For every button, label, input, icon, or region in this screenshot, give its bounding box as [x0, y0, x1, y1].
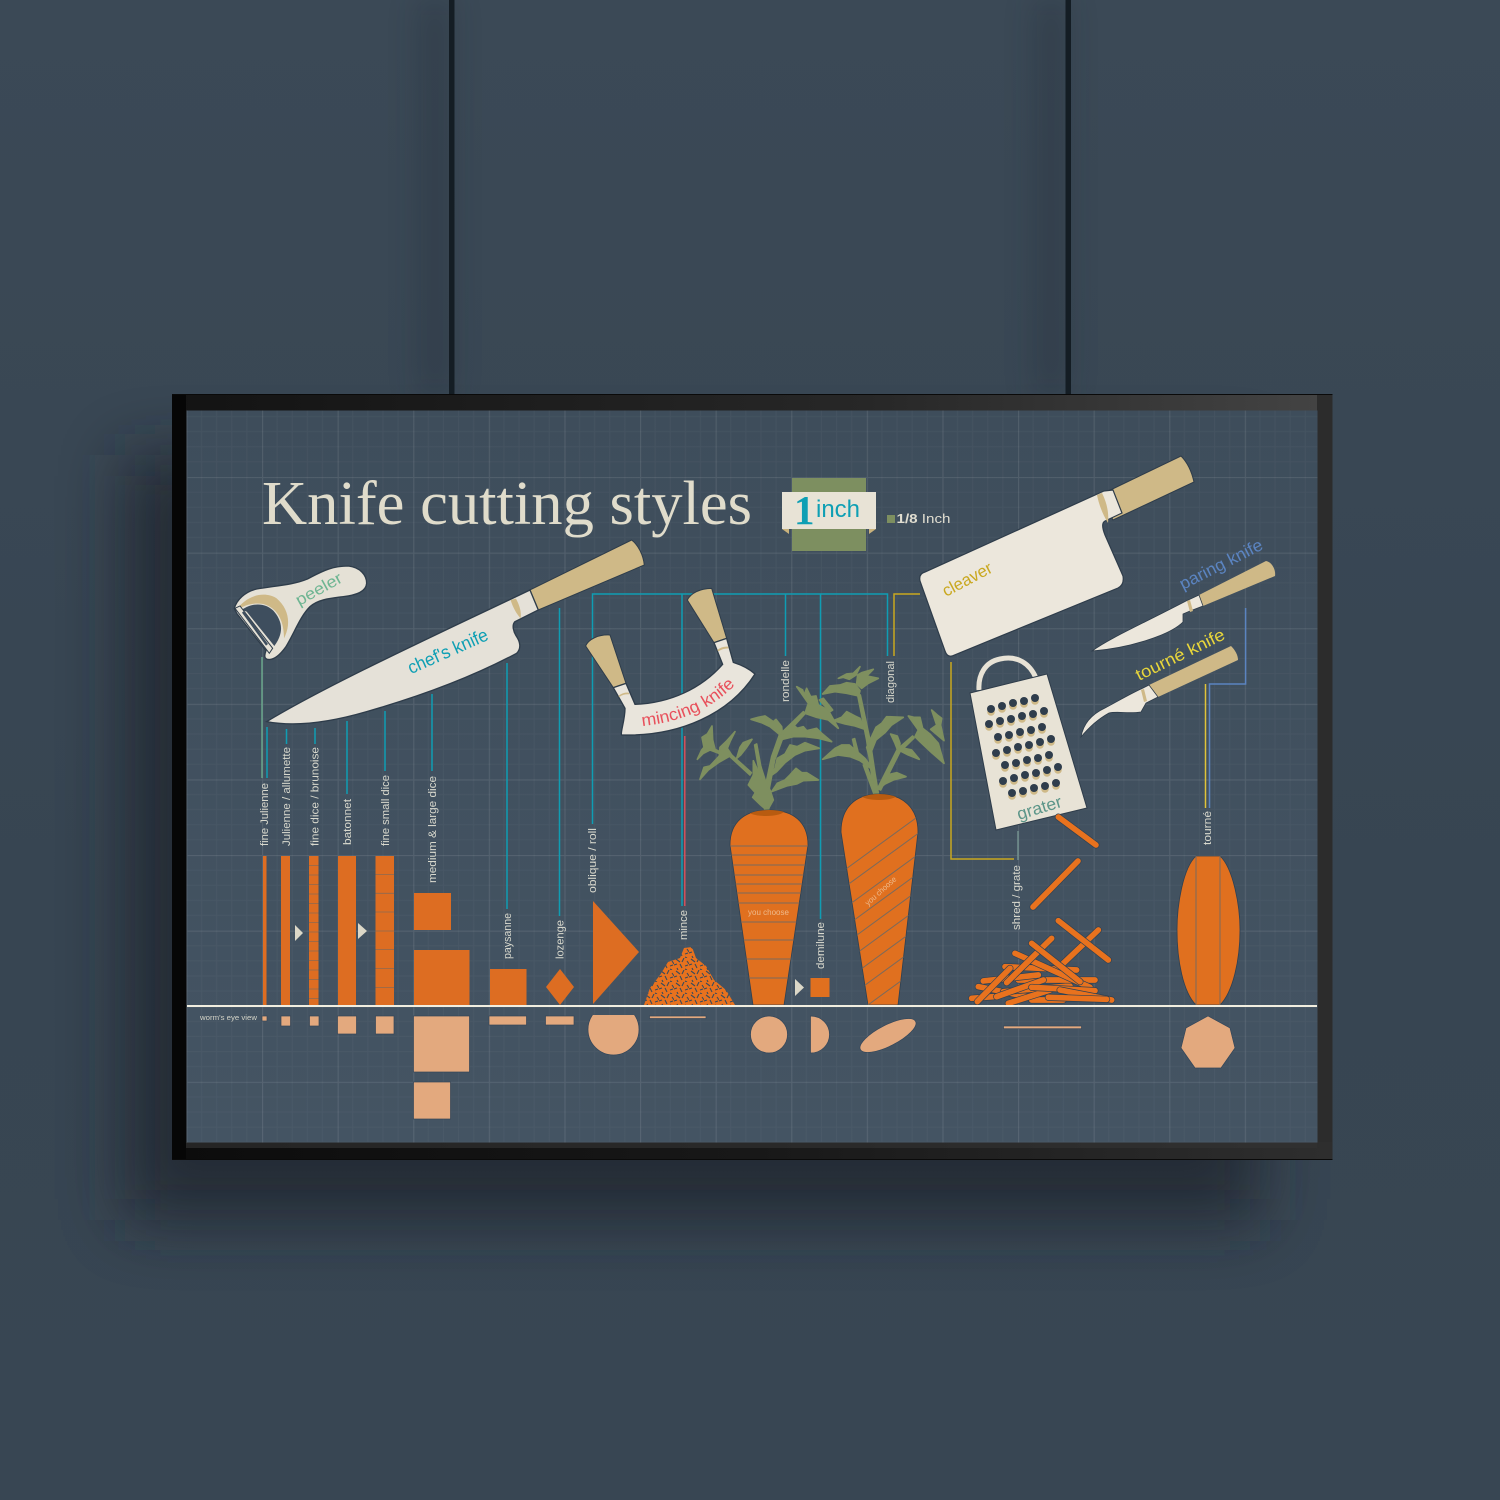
cut labels: fine Julienne — [259, 783, 271, 846]
label: grater: grater — [1015, 792, 1064, 824]
batons and dice: vertical sticks — [263, 856, 830, 1005]
title: Knife cutting styles — [262, 470, 752, 538]
loose shred top — [1033, 817, 1096, 907]
scale badge: 1 inch: inch — [816, 496, 860, 523]
tourné shape — [1177, 856, 1240, 1005]
cut labels: fine small dice — [380, 775, 392, 846]
text: you choose: you choose — [863, 874, 899, 907]
cut labels: diagonal — [885, 661, 897, 703]
poster frame — [172, 394, 1332, 1160]
carrot rondelle — [730, 810, 808, 1005]
ground line — [187, 1005, 1317, 1007]
chef's knife — [267, 540, 644, 724]
cut labels: paysanne — [502, 913, 514, 959]
scale badge: 1 inch: 1 — [794, 487, 814, 533]
arrow 1 — [295, 925, 303, 941]
scale key: 1/8 inch: 1/8 Inch — [896, 511, 950, 526]
cut labels: rondelle — [780, 660, 792, 702]
grater holes — [985, 697, 1062, 800]
cut labels: Julienne / allumette — [281, 747, 293, 846]
cut labels — [259, 660, 1214, 969]
worm's eye view label: worm's eye view — [199, 1013, 258, 1022]
scale badge: 1 inch — [782, 478, 876, 551]
mince pile — [644, 947, 735, 1005]
hanging strap left — [449, 0, 454, 396]
label: cleaver: cleaver — [939, 558, 996, 601]
fine dice stack — [309, 856, 318, 1005]
cut labels: mince — [678, 910, 690, 940]
arrow 2 — [358, 923, 367, 939]
peeler — [234, 566, 367, 660]
hanging strap right — [1066, 0, 1071, 396]
text: you choose: you choose — [748, 908, 790, 917]
grater — [970, 658, 1087, 830]
carrot foliage left — [697, 687, 838, 812]
cut labels: batonnet — [342, 799, 354, 845]
shredded carrot pile — [972, 921, 1112, 1003]
demilune cube — [810, 978, 830, 997]
cut labels: tourné — [1202, 811, 1214, 845]
carrot foliage right — [823, 667, 944, 795]
cut labels: medium & large dice — [427, 776, 439, 883]
mincing knife — [586, 588, 755, 735]
oblique — [593, 901, 639, 1004]
label: tourné knife: tourné knife — [1132, 625, 1228, 685]
cleaver — [920, 456, 1194, 656]
lozenge — [546, 969, 574, 1005]
label: peeler: peeler — [293, 569, 346, 609]
large dice — [414, 950, 470, 1005]
label: mincing knife: mincing knife — [642, 680, 734, 726]
medium dice — [414, 893, 451, 930]
cut labels: lozenge — [554, 920, 566, 959]
leader lines — [262, 594, 1246, 919]
worm's eye view cross-sections — [262, 1004, 1235, 1119]
fine Julienne stick — [263, 856, 266, 1005]
cut labels: oblique / roll — [587, 828, 599, 893]
batonnet stick — [338, 856, 356, 1005]
Julienne stick — [281, 856, 290, 1005]
carrot diagonal — [840, 794, 918, 1005]
label: paring knife: paring knife — [1176, 535, 1266, 594]
cut labels: shred / grate — [1011, 865, 1023, 930]
tourné knife — [1081, 625, 1238, 737]
arrow 3 — [795, 979, 804, 996]
cut labels: demilune — [815, 922, 827, 969]
label: chef's knife: chef's knife — [404, 624, 491, 678]
poster sheet — [186, 410, 1318, 1142]
cut labels: fine dice / brunoise — [310, 747, 322, 846]
paysanne — [490, 969, 526, 1005]
paring knife — [1092, 535, 1275, 651]
fine small dice stack — [376, 856, 394, 1005]
